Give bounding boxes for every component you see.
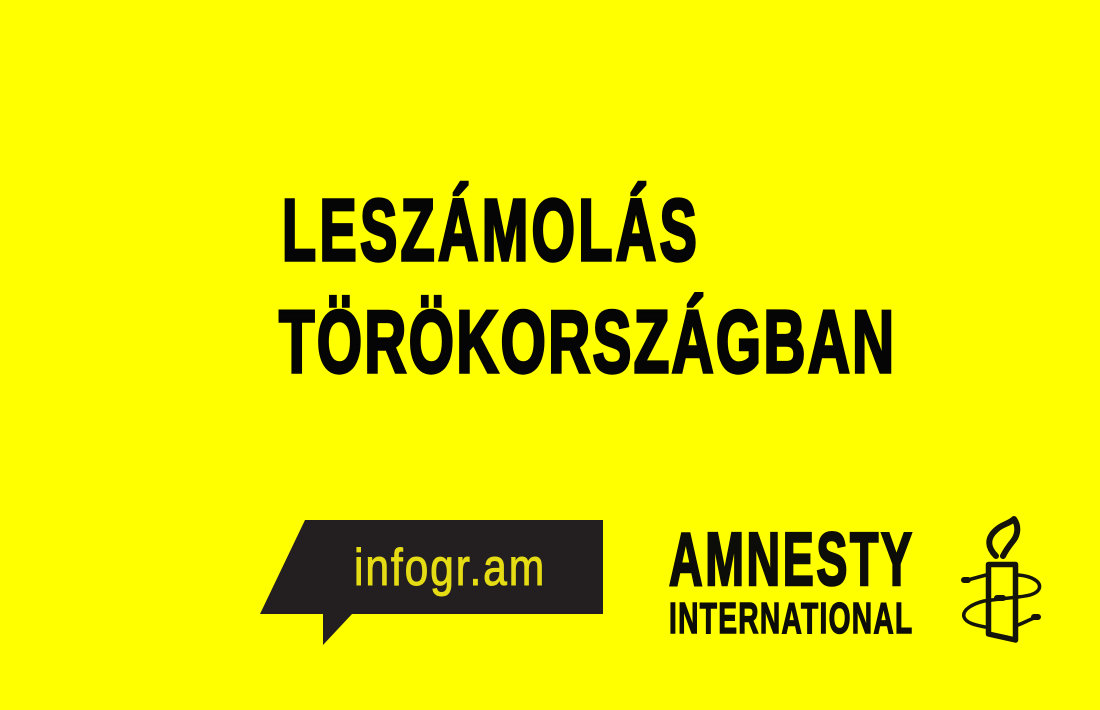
AMNESTY: AMNESTY [669,519,912,602]
candle flame [989,519,1017,556]
title line 2: TÖRÖKORSZÁGBAN [279,293,894,391]
title [279,183,894,391]
wire barbs [964,580,1038,617]
INTERNATIONAL: INTERNATIONAL [669,594,912,643]
infogr.am wordmark: infogr.am [354,539,544,597]
barbed wire [964,575,1040,627]
title line 1: LESZÁMOLÁS [282,183,697,279]
speech bubble [260,520,603,645]
candle body [988,564,1016,640]
infogr.am logo [260,520,603,645]
Amnesty International wordmark [669,519,912,643]
icon: Amnesty candle and barbed wire [964,519,1040,640]
